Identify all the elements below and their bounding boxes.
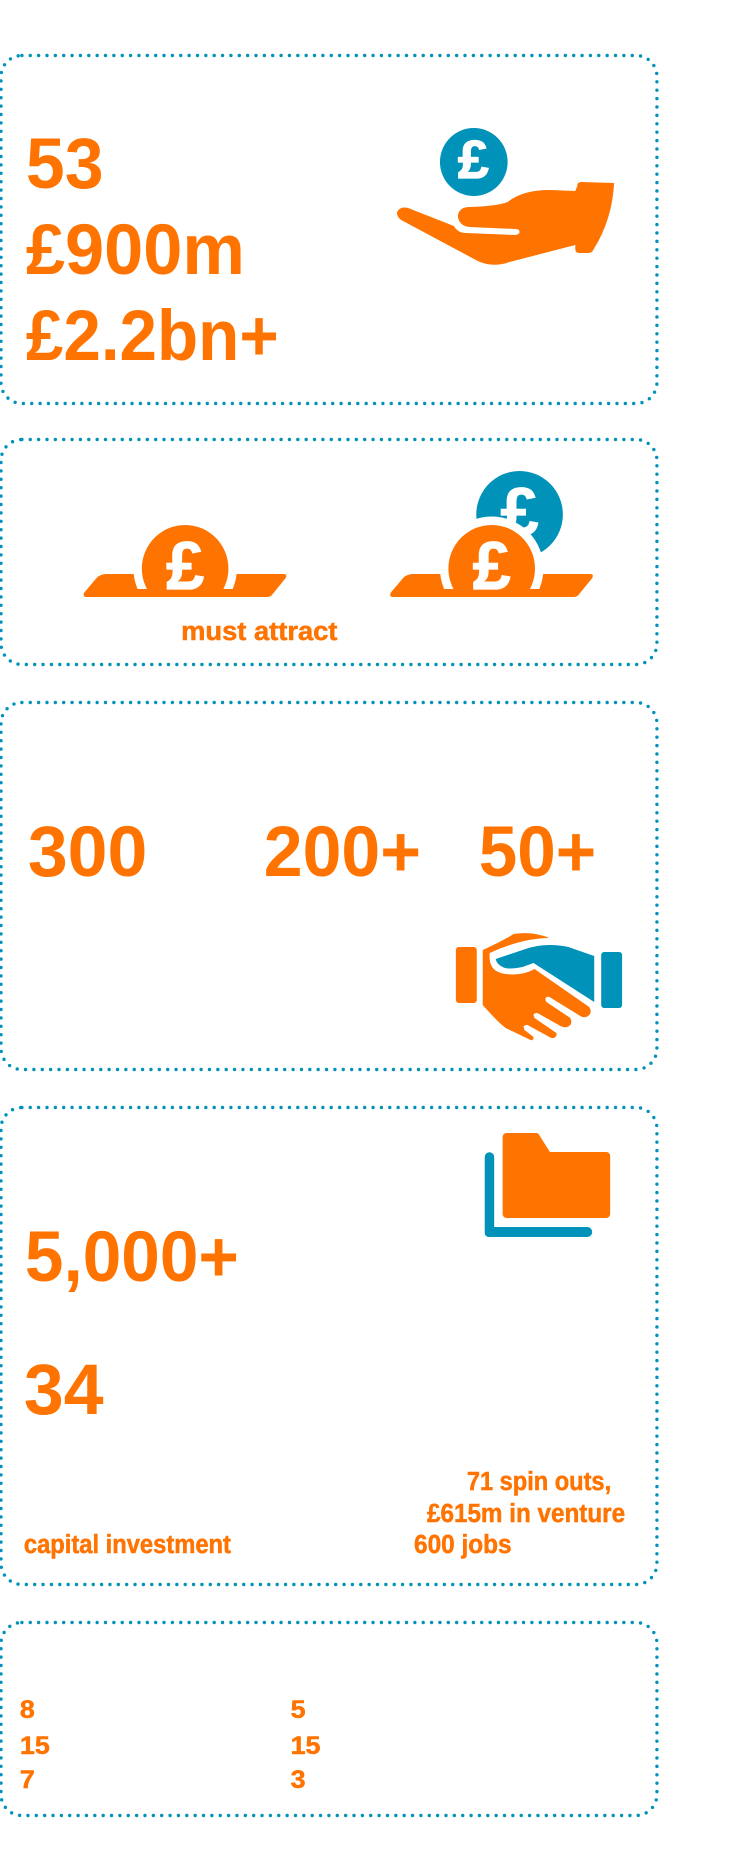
figure: 200+: 200+ xyxy=(264,813,421,892)
figure: £2.2bn+: £2.2bn+ xyxy=(26,297,279,376)
figure: 34: 34 xyxy=(24,1351,104,1430)
figure: 3: 3 xyxy=(291,1766,306,1794)
panel: partnerships xyxy=(1,702,657,1070)
icon: two coins in slot xyxy=(390,471,593,597)
figure: 53: 53 xyxy=(26,125,104,204)
icon: handshake xyxy=(456,933,622,1040)
text: £615m in venture: £615m in venture xyxy=(427,1500,625,1528)
figure: 15 right: 15 xyxy=(291,1732,321,1760)
text: must attract: must attract xyxy=(181,618,338,646)
icon: folder xyxy=(485,1133,610,1237)
figure: £900m: £900m xyxy=(26,211,245,290)
figure: 15 left: 15 xyxy=(20,1732,50,1760)
text: capital investment: capital investment xyxy=(24,1531,231,1559)
figure: 50+: 50+ xyxy=(479,813,596,892)
icon: single coin in slot xyxy=(84,525,286,597)
icon: hand holding pound coin xyxy=(397,128,614,265)
panel: research and investment xyxy=(1,1108,657,1584)
icon: two coins in slot: £ xyxy=(473,529,511,604)
figure: 300: 300 xyxy=(28,813,147,892)
figure: 7: 7 xyxy=(20,1766,35,1794)
figure: 8: 8 xyxy=(20,1696,35,1724)
panel: must attract xyxy=(1,440,657,664)
figure: 5: 5 xyxy=(291,1696,306,1724)
icon: hand holding pound coin: £ xyxy=(458,130,489,190)
text: 71 spin outs: 71 spin outs, xyxy=(467,1468,611,1496)
panel: counts xyxy=(1,1622,657,1816)
figure: 5,000+: 5,000+ xyxy=(25,1218,239,1297)
panel: funding figures xyxy=(1,56,657,404)
icon: two coins in slot: £ xyxy=(501,475,539,550)
text: 600 jobs: 600 jobs xyxy=(414,1531,512,1559)
icon: single coin in slot: £ xyxy=(166,529,204,604)
